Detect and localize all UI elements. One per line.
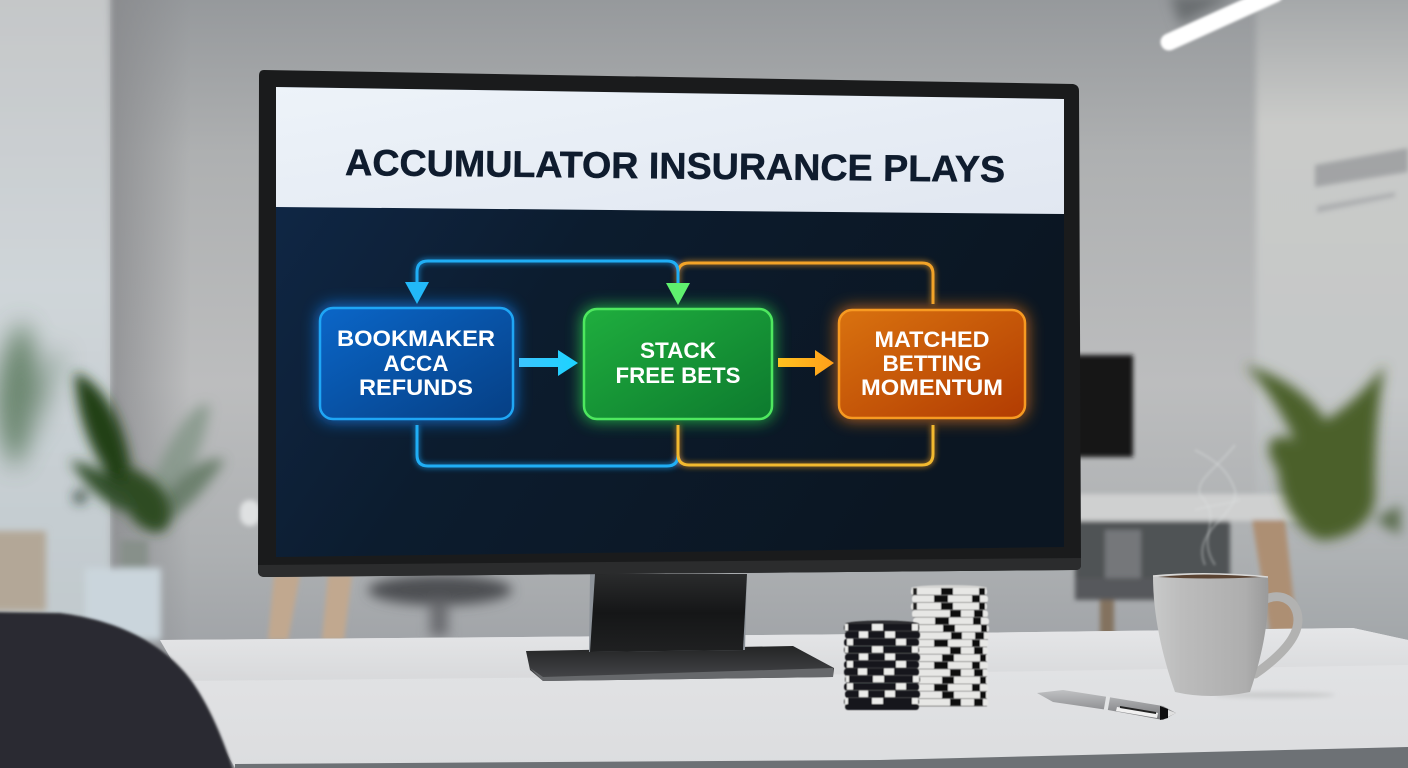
arrowhead: into bookmaker box xyxy=(405,282,429,304)
plant pots: left xyxy=(0,531,161,640)
plant: right xyxy=(1245,365,1400,540)
box: stack free bets: FREE BETS xyxy=(616,363,740,388)
box: matched betting momentum: MATCHED xyxy=(874,327,990,352)
wall sign xyxy=(1315,148,1408,213)
box: bookmaker acca refunds: REFUNDS xyxy=(359,375,473,400)
coffee mug xyxy=(1153,574,1335,698)
ceiling light xyxy=(1169,0,1275,42)
title: ACCUMULATOR INSURANCE PLAYS xyxy=(345,142,1005,190)
pen xyxy=(1037,690,1176,720)
box: bookmaker acca refunds: ACCA xyxy=(384,351,449,376)
box: matched betting momentum: MOMENTUM xyxy=(861,375,1003,400)
monitor screen xyxy=(276,87,1064,557)
steam xyxy=(1195,445,1240,565)
plant: left xyxy=(70,372,225,531)
arrow: bookmaker to free bets xyxy=(519,350,578,376)
plant: far left xyxy=(0,320,65,470)
connector: top blue loop xyxy=(417,261,678,285)
box: matched betting momentum xyxy=(839,310,1025,418)
connector: bottom orange loop xyxy=(678,425,933,465)
screen header band xyxy=(276,87,1064,214)
box: bookmaker acca refunds: BOOKMAKER xyxy=(337,326,495,351)
glow behind connectors xyxy=(417,261,933,466)
desk xyxy=(160,628,1408,768)
box: matched betting momentum: BETTING xyxy=(882,351,982,376)
box: stack free bets xyxy=(584,309,772,419)
arrow: free bets to matched betting xyxy=(778,350,834,376)
box: bookmaker acca refunds xyxy=(320,308,513,419)
poker chips: white stack xyxy=(911,585,989,706)
glow behind boxes xyxy=(318,305,1027,421)
background furniture xyxy=(240,355,1320,640)
arrowhead: into free bets box xyxy=(666,283,690,305)
poker chips: black stack xyxy=(844,620,920,710)
chair xyxy=(0,612,235,768)
connector: top orange loop xyxy=(678,263,933,304)
connector: bottom blue loop xyxy=(417,425,678,466)
flowchart xyxy=(318,261,1027,466)
monitor stand xyxy=(526,574,834,681)
box: stack free bets: STACK xyxy=(640,338,716,363)
monitor bezel xyxy=(258,70,1081,577)
